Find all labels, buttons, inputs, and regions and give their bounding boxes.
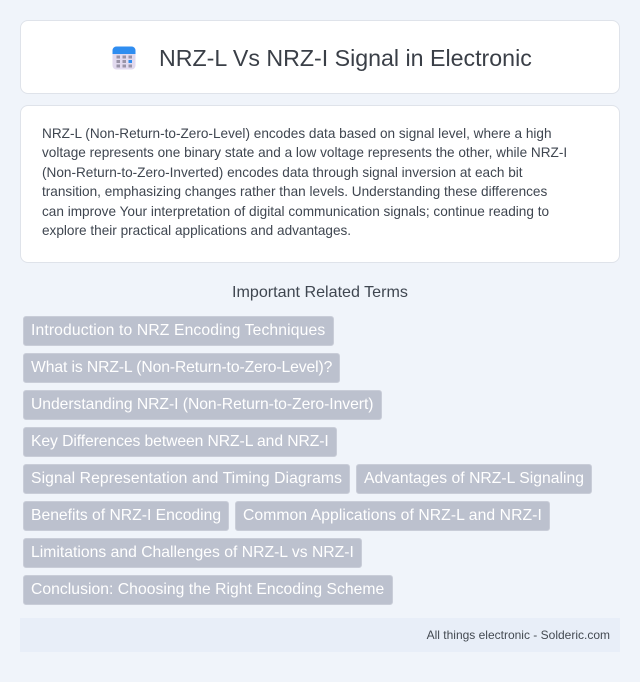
tag: key differences: Key Differences between NRZ-L and NRZ-I (31, 433, 329, 450)
tag: signal representation: Signal Representation and Timing Diagrams (31, 470, 342, 487)
tag: understanding NRZ-I: Understanding NRZ-I (Non-Return-to-Zero-Invert) (31, 396, 373, 413)
icon: calendar (112, 46, 136, 70)
tag: signal representation (23, 464, 350, 494)
tag: introduction (23, 316, 334, 346)
tag: benefits: Benefits of NRZ-I Encoding (31, 507, 221, 524)
description text (42, 126, 567, 238)
tag: applications: Common Applications of NRZ-L and NRZ-I (243, 507, 542, 524)
description text: (Non-Return-to-Zero-Inverted) encodes data through signal inversion at each bit (42, 165, 523, 180)
footer (20, 618, 620, 652)
header card (20, 20, 620, 94)
title: NRZ-L Vs NRZ-I Signal in Electronic (159, 45, 532, 71)
tag: conclusion (23, 575, 393, 605)
description text: can improve Your interpretation of digital communication signals; continue reading to (42, 204, 549, 219)
description card (20, 105, 620, 263)
tag: introduction: Introduction to NRZ Encoding Techniques (31, 322, 325, 339)
tag: what is NRZ-L (23, 353, 340, 383)
description text: transition, emphasizing changes rather than levels. Understanding these differences (42, 184, 547, 199)
description text: voltage represents one binary state and a low voltage represents the other, while NRZ-I (42, 145, 567, 160)
tag: what is NRZ-L: What is NRZ-L (Non-Return-to-Zero-Level)? (31, 359, 332, 376)
related terms heading: Important Related Terms (232, 283, 408, 301)
tag: understanding NRZ-I (23, 390, 382, 420)
tag: conclusion: Conclusion: Choosing the Right Encoding Scheme (31, 581, 384, 598)
description text: NRZ-L (Non-Return-to-Zero-Level) encodes data based on signal level, where a high (42, 126, 552, 141)
footer: All things electronic - Solderic.com (427, 628, 610, 642)
tag: limitations (23, 538, 362, 568)
tag: applications (235, 501, 550, 531)
tag: benefits (23, 501, 229, 531)
related terms tags (23, 316, 592, 605)
tag: key differences (23, 427, 337, 457)
description text: explore their practical applications and advantages. (42, 223, 351, 238)
tag: advantages: Advantages of NRZ-L Signaling (364, 470, 584, 487)
tag: limitations: Limitations and Challenges of NRZ-L vs NRZ-I (31, 544, 354, 561)
tag: advantages (356, 464, 592, 494)
